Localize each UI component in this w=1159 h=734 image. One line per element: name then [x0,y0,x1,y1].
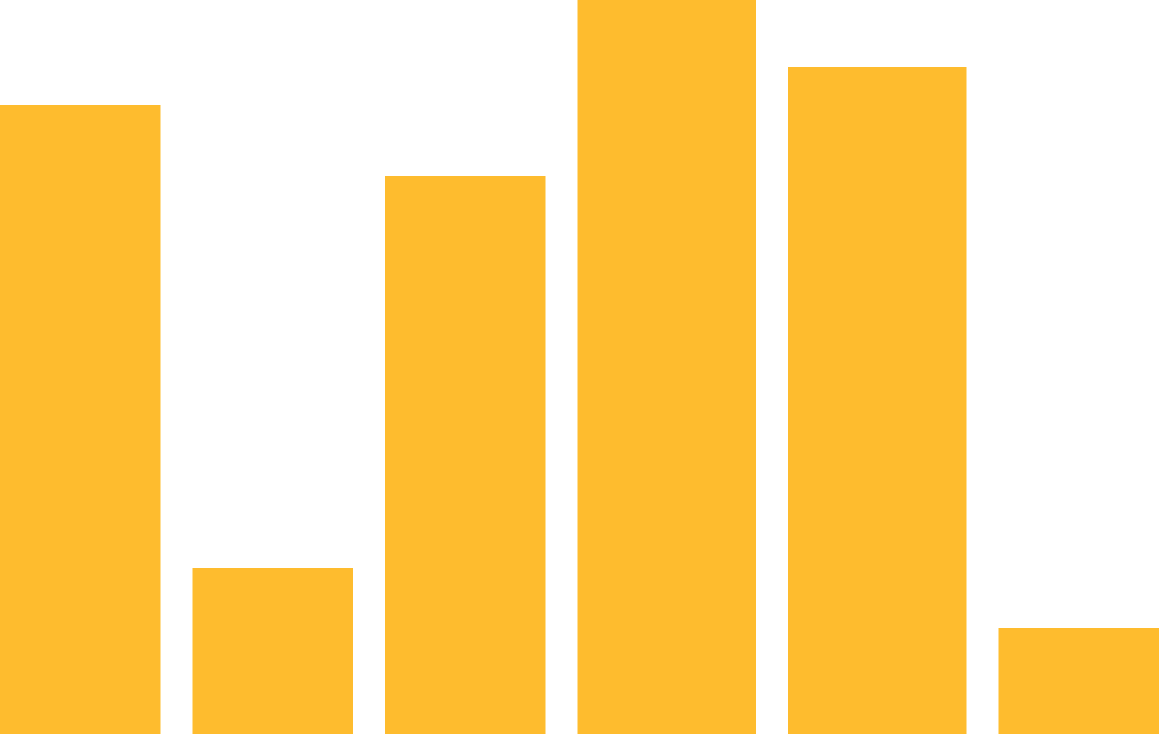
bar 1 [0,105,160,734]
bar 5 [788,67,966,734]
bar 2 [192,568,353,734]
bar 6 [998,628,1159,734]
bar 4 [578,0,756,734]
bar 3 [385,176,546,734]
